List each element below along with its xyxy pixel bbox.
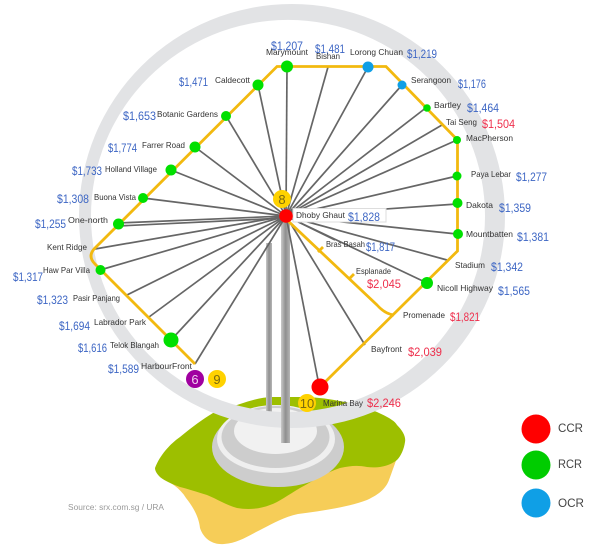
station: Lorong Chuan: Lorong Chuan (350, 47, 403, 57)
station: One-north: One-north (68, 215, 108, 225)
station: Botanic Gardens (123, 109, 218, 123)
station: Promenade (403, 310, 480, 324)
station: Buona Vista (57, 192, 136, 206)
station: Tai Seng: $1,504 (482, 119, 516, 131)
station: Bayfront (371, 344, 442, 359)
station: Bishan: Bishan (316, 51, 340, 61)
station: Farrer Road (108, 140, 185, 155)
station: Holland Village: Holland Village (105, 164, 157, 174)
station: Bayfront: Bayfront (371, 344, 403, 354)
station: Buona Vista: Buona Vista (94, 192, 136, 202)
station: Labrador Park: $1,694 (59, 321, 91, 333)
wheel ring (79, 4, 505, 428)
station: Tai Seng (446, 117, 516, 131)
station: Bartley: Bartley (434, 100, 462, 110)
station: Marymount (266, 41, 309, 57)
line badge 8: 8 (278, 192, 286, 207)
station: Serangoon (411, 75, 486, 91)
station: Lorong Chuan (350, 47, 437, 61)
station: Farrer Road: $1,774 (108, 143, 137, 155)
line badge 8 (273, 190, 291, 208)
station: Farrer Road: Farrer Road (142, 140, 185, 150)
station: MacPherson: MacPherson (466, 133, 513, 143)
station: HarbourFront: HarbourFront (141, 361, 193, 371)
station: Haw Par Villa: $1,317 (13, 272, 43, 284)
station: Holland Village: $1,733 (72, 166, 102, 178)
line badge 9 (208, 370, 226, 388)
station: Caldecott (179, 75, 251, 89)
station: Caldecott: Caldecott (215, 75, 251, 85)
station: Esplanade: $2,045 (367, 279, 401, 291)
station: Caldecott: $1,471 (179, 77, 208, 89)
station: Buona Vista: $1,308 (57, 194, 89, 206)
station: Haw Par Villa (13, 265, 90, 284)
station: Bartley: $1,464 (467, 103, 500, 115)
monument base (212, 405, 344, 487)
Dhoby Ghaut interchange marker (279, 209, 293, 223)
line badge 6: 6 (191, 372, 199, 387)
station: Bishan (315, 44, 345, 61)
station: Labrador Park: Labrador Park (94, 317, 147, 327)
station: Lorong Chuan: $1,219 (407, 49, 437, 61)
station markers (96, 60, 463, 396)
station: Pasir Panjang: Pasir Panjang (73, 293, 120, 303)
line badge 10: 10 (300, 396, 314, 411)
station: Dakota: $1,359 (499, 203, 531, 215)
station: Bishan: $1,481 (315, 44, 345, 56)
station: Telok Blangah: $1,616 (78, 343, 107, 355)
station: Marymount: $1,207 (271, 41, 303, 53)
station: Mountbatten: $1,381 (517, 232, 549, 244)
line badge 10 (298, 394, 316, 412)
station: Nicoll Highway: Nicoll Highway (437, 283, 494, 293)
station: Stadium (455, 260, 523, 274)
station: Haw Par Villa: Haw Par Villa (43, 265, 90, 275)
station: Botanic Gardens: $1,653 (123, 111, 156, 123)
station: Tai Seng: Tai Seng (446, 117, 477, 127)
station: One-north: $1,255 (35, 219, 66, 231)
front support pole (281, 216, 290, 443)
station: Dakota (466, 200, 531, 215)
station: Bras Basah: $1,817 (366, 242, 395, 254)
legend item: RCR: RCR (558, 457, 582, 471)
station: Serangoon: $1,176 (458, 79, 486, 91)
station: Promenade: $1,821 (450, 312, 480, 324)
station: Paya Lebar: $1,277 (516, 172, 547, 184)
station: Nicoll Highway: $1,565 (498, 286, 530, 298)
station: Stadium: $1,342 (491, 262, 523, 274)
Dhoby Ghaut label box (293, 208, 386, 222)
station: Marymount: Marymount (266, 47, 309, 57)
circle line route (91, 66, 458, 387)
legend item: OCR: OCR (558, 496, 584, 510)
station: Promenade: Promenade (403, 310, 445, 320)
station: Marina Bay: $2,246 (367, 398, 401, 410)
station: Dhoby Ghaut (296, 210, 380, 224)
rear support pole (266, 243, 272, 413)
station: Mountbatten: Mountbatten (466, 229, 513, 239)
station: Botanic Gardens: Botanic Gardens (157, 109, 218, 119)
station: Dhoby Ghaut: $1,828 (348, 212, 380, 224)
station: Labrador Park (59, 317, 147, 333)
station: Esplanade: Esplanade (356, 266, 391, 276)
station: Esplanade (356, 266, 401, 291)
ground: sand (160, 440, 397, 544)
station: Telok Blangah: Telok Blangah (110, 340, 159, 350)
station: Kent Ridge: Kent Ridge (47, 242, 87, 252)
source note: Source: srx.com.sg / URA (68, 503, 165, 512)
station: Nicoll Highway (437, 283, 530, 298)
line badge 9: 9 (213, 372, 221, 387)
station: Bras Basah (326, 239, 395, 254)
station: Bayfront: $2,039 (408, 347, 442, 359)
station: Dakota: Dakota (466, 200, 493, 210)
station: Bras Basah: Bras Basah (326, 239, 365, 249)
station: Telok Blangah (78, 340, 159, 355)
station: Stadium: Stadium (455, 260, 485, 270)
station: Marina Bay (323, 398, 401, 410)
station: Paya Lebar (471, 169, 547, 184)
station: Holland Village (72, 164, 157, 178)
ground: grass (155, 397, 405, 509)
station: Dhoby Ghaut: Dhoby Ghaut (296, 210, 346, 220)
legend item: CCR: CCR (558, 421, 583, 435)
station: Mountbatten (466, 229, 549, 244)
station: HarbourFront: $1,589 (108, 364, 139, 376)
station: Paya Lebar: Paya Lebar (471, 169, 511, 179)
line badge 6 (186, 370, 204, 388)
station: Pasir Panjang: $1,323 (37, 295, 68, 307)
wheel spokes (95, 67, 457, 380)
station: Serangoon: Serangoon (411, 75, 451, 85)
station: HarbourFront (108, 361, 193, 376)
station: One-north (35, 215, 108, 231)
station: Bartley (434, 100, 500, 115)
station: Pasir Panjang (37, 293, 120, 307)
station: Marina Bay: Marina Bay (323, 398, 364, 408)
legend (522, 414, 584, 518)
